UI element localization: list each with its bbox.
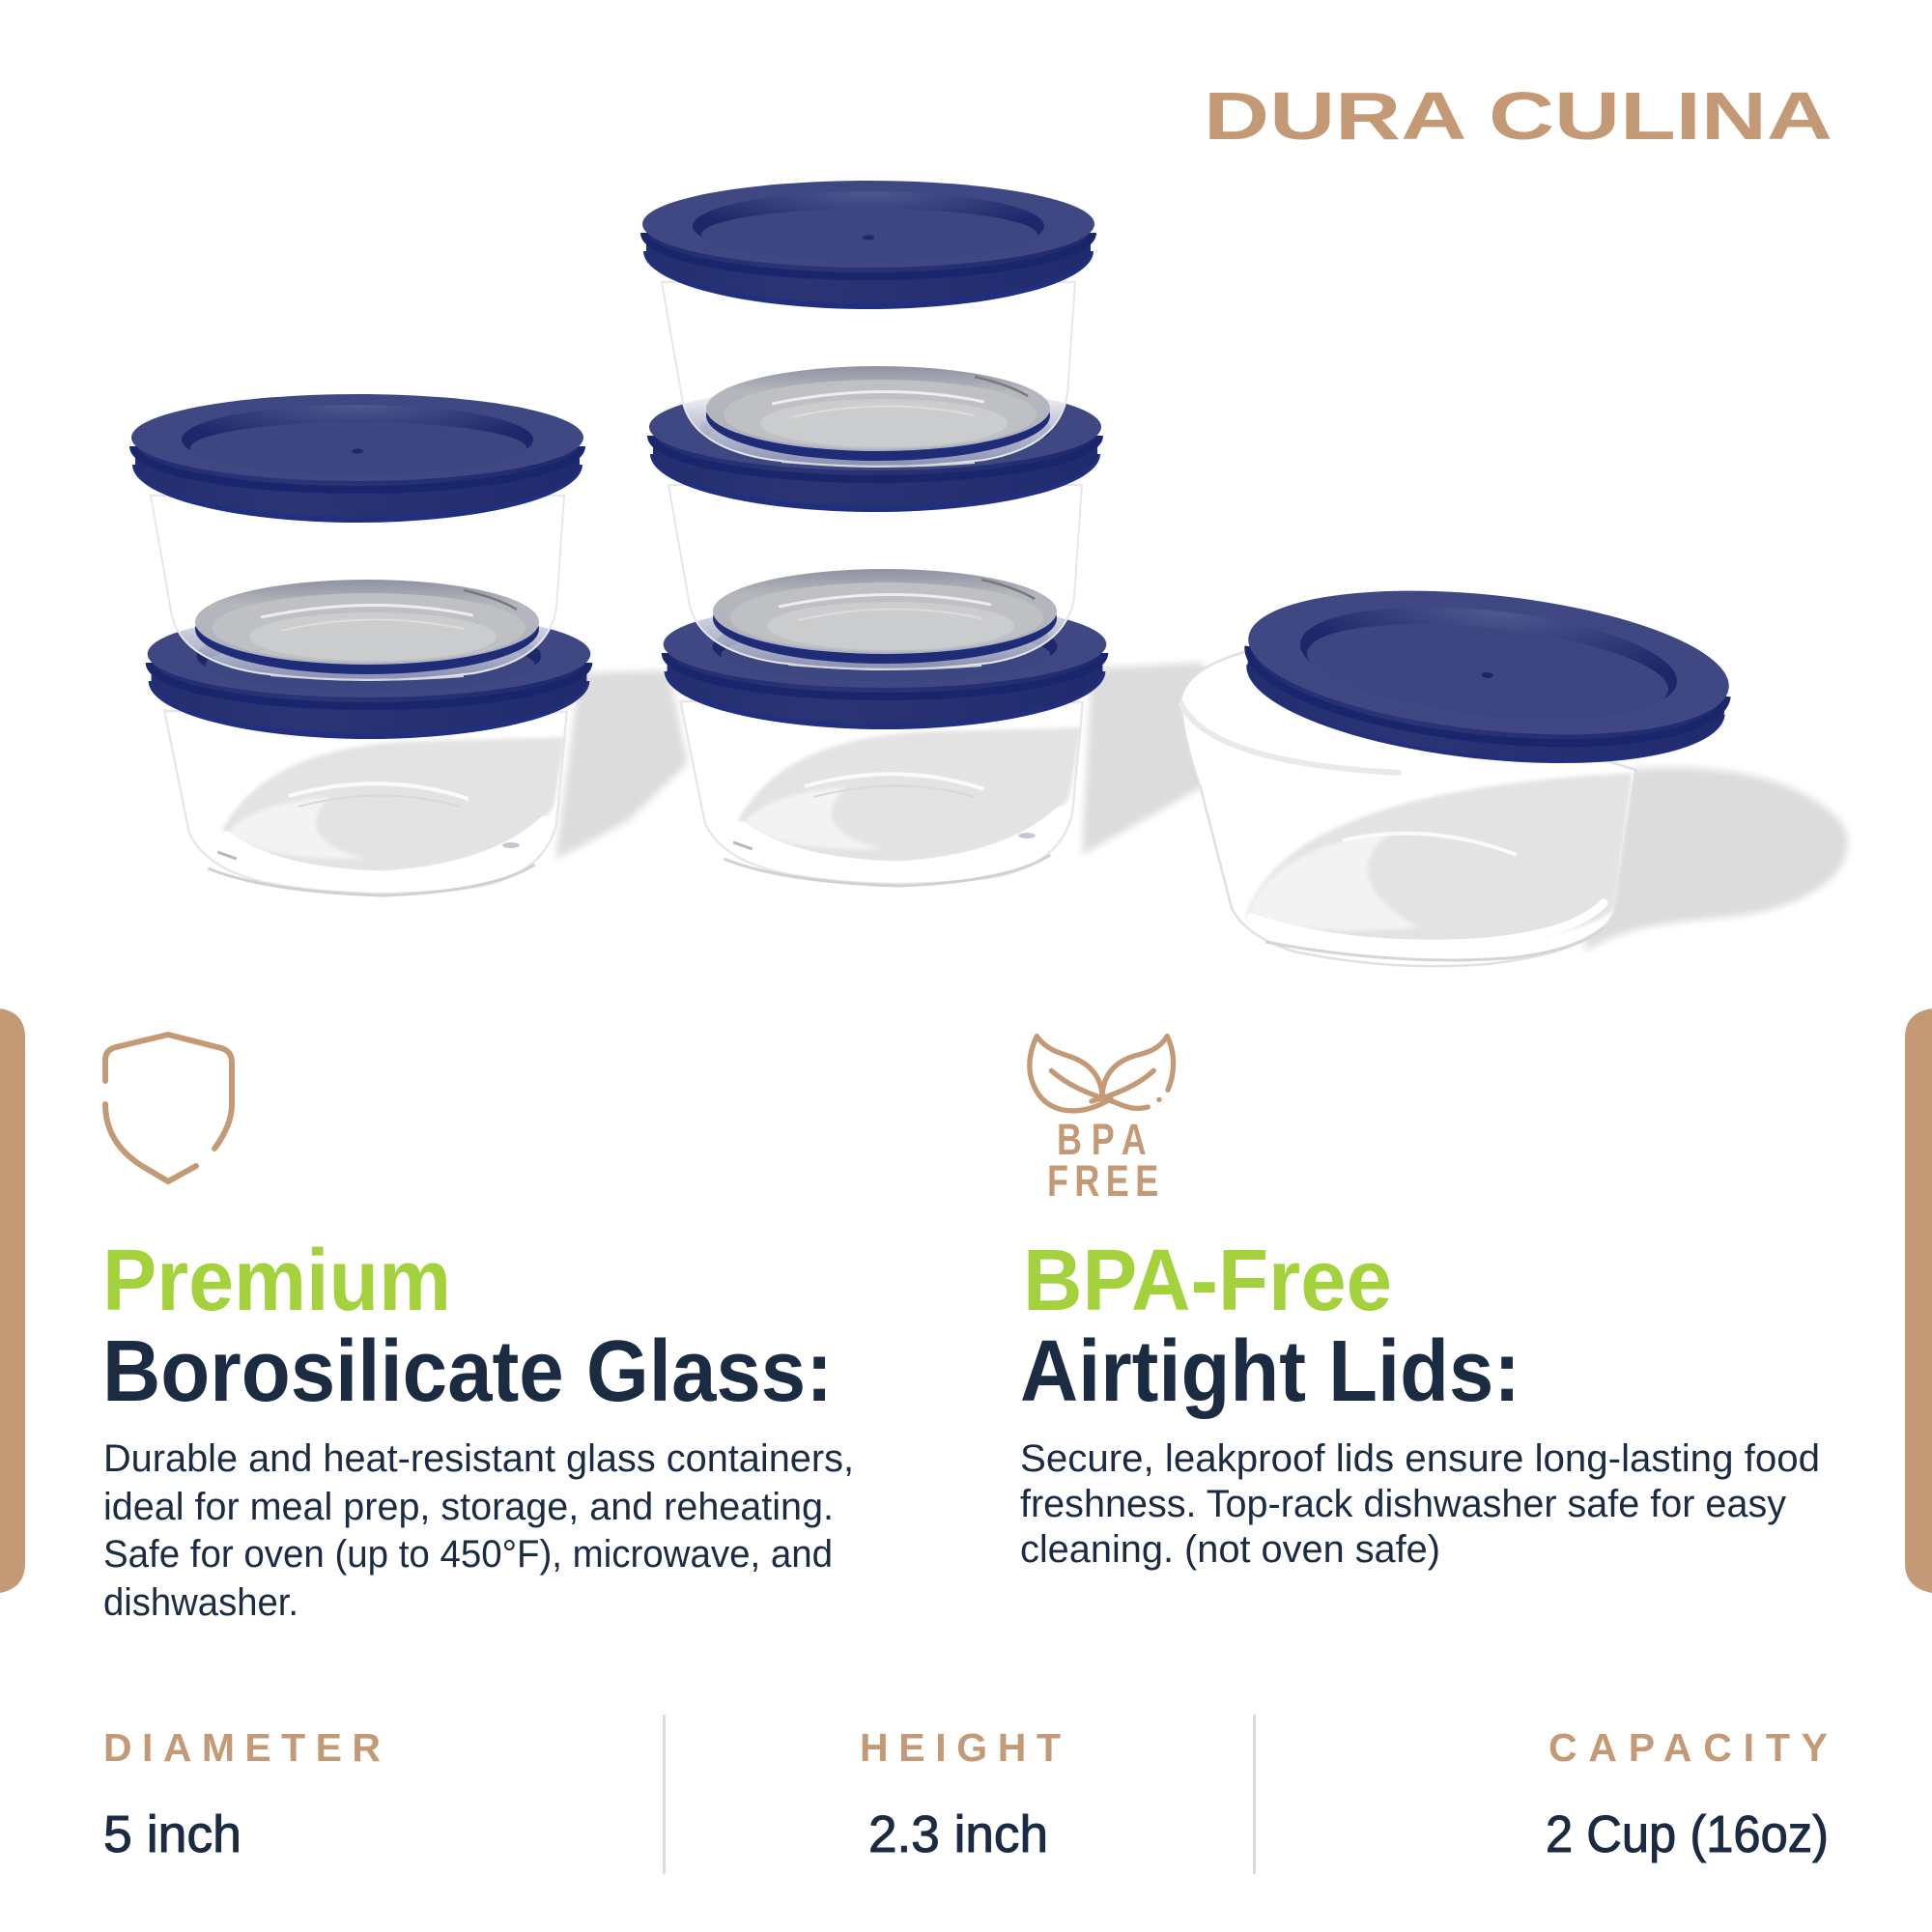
- icon: BPA free leaves: FREE: [1047, 1156, 1158, 1206]
- table shadows: [555, 663, 1848, 952]
- icon: BPA free leaves: BPA: [1057, 1115, 1147, 1164]
- container: left bottom: [148, 611, 590, 895]
- product photo: container with lid ajar: [1180, 570, 1736, 966]
- text block: lids description: freshness. Top-rack dishwasher safe for easy: [1020, 1483, 1786, 1525]
- spec: capacity: [1546, 1725, 1829, 1863]
- text block: glass description: Safe for oven (up to 450°F), microwave, and: [103, 1533, 833, 1576]
- text block: glass description: Durable and heat-resistant glass containers,: [103, 1437, 854, 1480]
- icon: BPA free leaves: [1030, 1037, 1174, 1206]
- text block: lids description: [1020, 1437, 1820, 1571]
- text block: lids description: cleaning. (not oven safe): [1020, 1528, 1440, 1571]
- text block: glass description: dishwasher.: [103, 1581, 298, 1624]
- spec: capacity: 2 Cup (16oz): [1546, 1805, 1829, 1863]
- side bar left: [0, 1009, 25, 1593]
- spec: height: 2.3 inch: [868, 1805, 1048, 1863]
- container: centre middle: [649, 384, 1101, 669]
- text block: glass description: ideal for meal prep, storage, and reheating.: [103, 1486, 834, 1528]
- product photo: centre stack: [642, 181, 1106, 886]
- spec: capacity: CAPACITY: [1548, 1725, 1828, 1770]
- spec: diameter: 5 inch: [103, 1805, 242, 1863]
- heading: premium borosilicate glass: [102, 1233, 833, 1420]
- lid: [1238, 570, 1736, 784]
- heading: BPA-free airtight lids: BPA-Free: [1023, 1233, 1392, 1329]
- spec: height: HEIGHT: [860, 1725, 1061, 1770]
- spec: diameter: [103, 1725, 381, 1863]
- product photo: left stack: [131, 394, 590, 895]
- icon: shield: [105, 1035, 232, 1181]
- spec: height: [860, 1725, 1061, 1863]
- brand name: DURA CULINA: [1204, 78, 1833, 154]
- spec: diameter: DIAMETER: [103, 1725, 381, 1770]
- container: left top: [131, 394, 583, 680]
- text block: lids description: Secure, leakproof lids ensure long-lasting food: [1020, 1437, 1820, 1480]
- container: centre bottom: [664, 601, 1106, 886]
- side bar right: [1905, 1009, 1932, 1593]
- container: centre top: [642, 181, 1094, 467]
- text block: glass description: [103, 1437, 854, 1624]
- heading: BPA-free airtight lids: [1020, 1233, 1520, 1420]
- heading: BPA-free airtight lids: Airtight Lids:: [1020, 1323, 1520, 1420]
- heading: premium borosilicate glass: Borosilicate Glass:: [102, 1323, 833, 1420]
- heading: premium borosilicate glass: Premium: [102, 1233, 451, 1329]
